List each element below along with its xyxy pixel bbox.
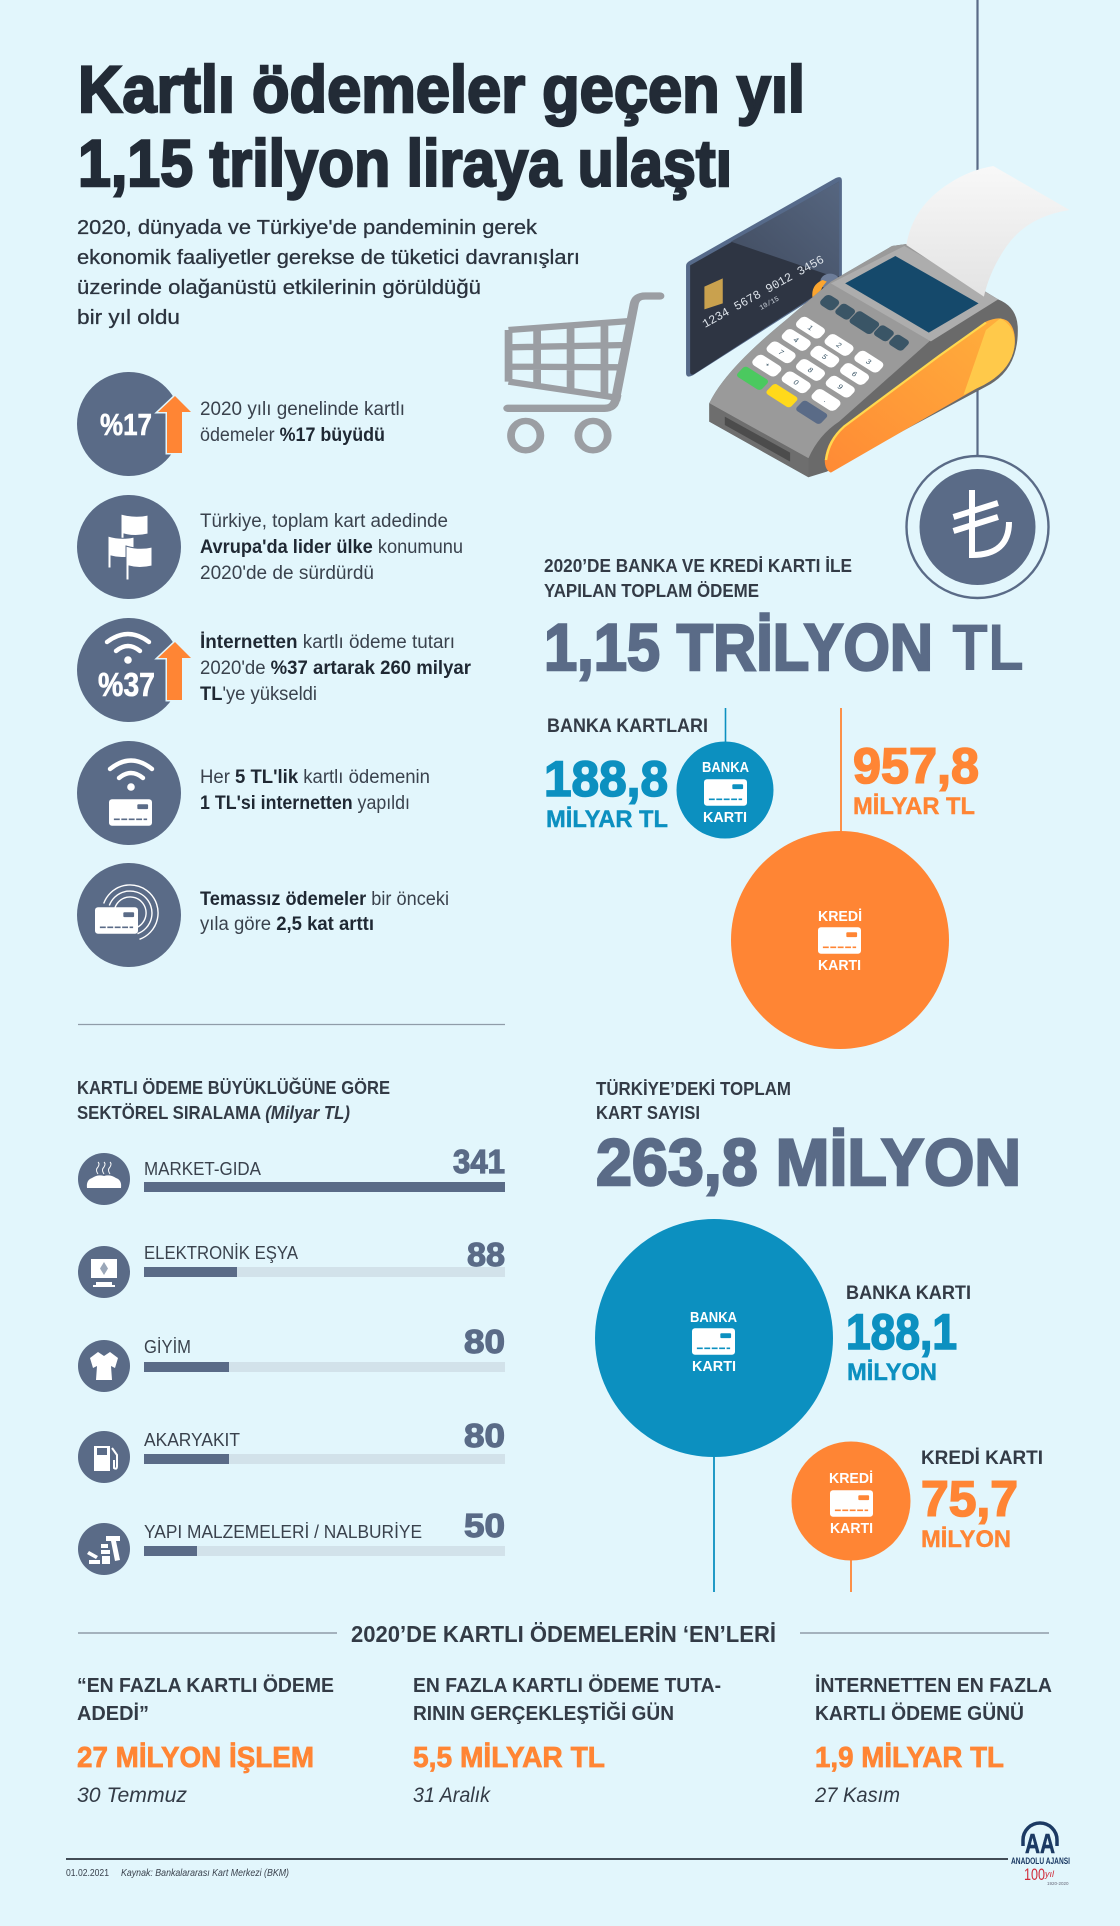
intro paragraph — [77, 216, 580, 329]
vertical connector line — [976, 0, 979, 456]
icon: lira coin — [906, 456, 1048, 598]
row: yapi malzemeleri: 50 — [464, 1507, 505, 1544]
fact 2: flags — [77, 495, 463, 599]
row: giyim — [78, 1323, 505, 1392]
column: highest payment day: RININ GERÇEKLEŞTİĞİ GÜN — [413, 1701, 674, 1725]
total card count heading — [596, 1079, 791, 1123]
fact 4: 5 TL internet — [77, 741, 430, 845]
intro paragraph: üzerinde olağanüstü etkilerinin görüldüğü — [77, 276, 481, 299]
column: highest payment day: 5,5 MİLYAR TL — [413, 1742, 605, 1774]
footer: date and source — [66, 1868, 289, 1879]
icon: POS terminal: 3 — [864, 357, 874, 366]
fact 2: flags: Avrupa'da lider ülke konumunu — [200, 537, 463, 558]
column: highest internet payment day: 1,9 MİLYAR TL — [815, 1742, 1004, 1774]
bank card count bubble: MİLYON — [847, 1359, 937, 1386]
fact 1: %17 growth — [77, 372, 405, 476]
fact 2: flags: Türkiye, toplam kart adedinde — [200, 511, 448, 532]
intro paragraph: ekonomik faaliyetler gerekse de tüketici davranışları — [77, 246, 580, 269]
fact 3: %37 internet: %37 — [98, 666, 155, 703]
total payment heading: YAPILAN TOPLAM ÖDEME — [544, 581, 759, 601]
icon: POS terminal: * — [762, 362, 771, 370]
total card count figure: 263,8 MİLYON — [596, 1125, 1021, 1199]
sector chart heading — [77, 1077, 390, 1123]
title: 1,15 trilyon liraya ulaştı — [78, 126, 732, 200]
column: most card payments: “EN FAZLA KARTLI ÖDEME — [77, 1674, 334, 1697]
footer: date and source: 01.02.2021 — [66, 1868, 109, 1879]
sector chart heading: SEKTÖREL SIRALAMA (Milyar TL) — [77, 1103, 350, 1123]
fact 3: %37 internet — [77, 618, 472, 722]
credit card payment bubble: MİLYAR TL — [853, 793, 975, 820]
column: highest payment day: 31 Aralık — [413, 1784, 491, 1807]
bank card payment bubble: BANKA — [702, 759, 749, 776]
logo: Anadolu Ajansi: ANADOLU AJANSI — [1011, 1856, 1070, 1866]
icon: POS terminal: 1 — [806, 323, 815, 332]
logo: Anadolu Ajansi: 100 — [1024, 1865, 1045, 1884]
bank card payment bubble — [544, 708, 774, 838]
icon: POS terminal: 4 — [791, 336, 801, 344]
total payment heading: 2020’DE BANKA VE KREDİ KARTI İLE — [544, 556, 852, 576]
icon: POS terminal: . — [822, 396, 830, 404]
intro paragraph: bir yıl oldu — [77, 306, 180, 329]
title — [78, 52, 805, 200]
bank card count bubble: KARTI — [692, 1358, 736, 1375]
fact 1: %17 growth: 2020 yılı genelinde kartlı — [200, 399, 405, 420]
fact 1: %17 growth: ödemeler %17 büyüdü — [200, 425, 385, 446]
fact 5: contactless — [77, 863, 449, 967]
bests section heading: 2020’DE KARTLI ÖDEMELERİN ‘EN’LERİ — [351, 1621, 776, 1647]
fact 4: 5 TL internet: 1 TL'si internetten yapıldı — [200, 793, 410, 814]
fact 5: contactless: yıla göre 2,5 kat arttı — [200, 914, 374, 935]
total card count heading: TÜRKİYE’DEKİ TOPLAM — [596, 1079, 791, 1099]
icon: POS terminal: 5 — [820, 352, 830, 361]
credit card count bubble: 75,7 — [921, 1471, 1018, 1527]
column: highest internet payment day: KARTLI ÖDEME GÜNÜ — [815, 1702, 1024, 1725]
column: most card payments — [77, 1674, 334, 1807]
total card count heading: KART SAYISI — [596, 1103, 700, 1123]
footer: date and source: Kaynak: Bankalararası Kart Merkezi (BKM) — [121, 1868, 289, 1879]
icon: POS terminal: 8 — [806, 366, 815, 374]
logo: Anadolu Ajansi: yıl — [1044, 1869, 1055, 1879]
bank card count bubble — [595, 1219, 971, 1592]
icon: POS terminal: 9 — [835, 382, 845, 391]
row: akaryakit: AKARYAKIT — [144, 1430, 240, 1450]
intro paragraph: 2020, dünyada ve Türkiye'de pandeminin gerek — [77, 216, 538, 239]
row: market-gida: MARKET-GIDA — [144, 1159, 261, 1179]
bank card payment bubble: BANKA KARTLARI — [547, 716, 708, 737]
row: elektronik esya: ELEKTRONİK EŞYA — [144, 1243, 298, 1263]
column: most card payments: ADEDİ” — [77, 1702, 149, 1725]
title: Kartlı ödemeler geçen yıl — [78, 52, 805, 126]
row: giyim: GİYİM — [144, 1337, 191, 1357]
row: elektronik esya — [78, 1236, 505, 1298]
bank card count bubble: BANKA KARTI — [846, 1282, 971, 1304]
credit card payment bubble: KARTI — [818, 957, 861, 974]
fact 5: contactless: Temassız ödemeler bir önceki — [200, 889, 449, 910]
icon: credit card — [686, 177, 842, 377]
column: highest payment day: EN FAZLA KARTLI ÖDEME TUTA- — [413, 1674, 721, 1697]
icon: credit card: 1234 5678 9012 3456 — [700, 253, 827, 331]
fact 2: flags: 2020'de de sürdürdü — [200, 563, 374, 584]
row: elektronik esya: 88 — [467, 1236, 505, 1273]
sector chart heading: KARTLI ÖDEME BÜYÜKLÜĞÜNE GÖRE — [77, 1077, 390, 1098]
icon: POS terminal: 0 — [791, 378, 801, 387]
row: market-gida: 341 — [453, 1143, 505, 1180]
logo: Anadolu Ajansi: 1920-2020 — [1047, 1881, 1069, 1886]
fact 3: %37 internet: 2020'de %37 artarak 260 milyar — [200, 658, 472, 679]
credit card payment bubble: KREDİ — [818, 908, 862, 925]
bank card count bubble: 188,1 — [846, 1304, 957, 1360]
bank card count bubble: BANKA — [690, 1309, 737, 1326]
logo: Anadolu Ajansi: AA — [1025, 1828, 1055, 1859]
bar chart: sectors — [78, 1143, 505, 1575]
column: highest payment day — [413, 1674, 721, 1807]
credit card count bubble — [792, 1442, 1043, 1592]
credit card payment bubble: 957,8 — [853, 738, 979, 794]
fact 3: %37 internet: TL'ye yükseldi — [200, 684, 317, 705]
column: highest internet payment day — [814, 1674, 1052, 1807]
column: highest internet payment day: 27 Kasım — [814, 1784, 900, 1807]
total payment figure: TL — [952, 610, 1024, 684]
total payment heading — [544, 556, 852, 601]
row: yapi malzemeleri — [78, 1507, 505, 1575]
fact 1: %17 growth: %17 — [100, 407, 152, 442]
total payment figure: 1,15 TRİLYON — [544, 610, 933, 684]
logo: Anadolu Ajansi — [1011, 1823, 1070, 1886]
row: akaryakit — [78, 1417, 505, 1483]
fact 4: 5 TL internet: Her 5 TL'lik kartlı ödemenin — [200, 767, 430, 788]
fact 3: %37 internet: İnternetten kartlı ödeme tutarı — [200, 632, 455, 653]
credit card count bubble: KREDİ — [829, 1470, 873, 1487]
icon: POS terminal: 2 — [834, 341, 844, 349]
icon: shopping cart — [508, 296, 660, 450]
icon: credit card: 10/15 — [759, 295, 781, 313]
icon: POS terminal: 7 — [776, 348, 786, 357]
bank card payment bubble: MİLYAR TL — [546, 806, 668, 833]
bank card payment bubble: KARTI — [703, 809, 747, 826]
column: most card payments: 27 MİLYON İŞLEM — [77, 1742, 314, 1774]
credit card count bubble: MİLYON — [921, 1526, 1011, 1553]
row: market-gida — [78, 1143, 505, 1205]
row: yapi malzemeleri: YAPI MALZEMELERİ / NALBURİYE — [144, 1522, 422, 1542]
credit card count bubble: KREDİ KARTI — [921, 1446, 1043, 1469]
bank card payment bubble: 188,8 — [544, 751, 668, 807]
column: most card payments: 30 Temmuz — [77, 1784, 188, 1807]
icon: POS terminal: 6 — [850, 370, 859, 378]
credit card payment bubble — [731, 708, 979, 1049]
icon: POS terminal — [709, 166, 1070, 477]
credit card count bubble: KARTI — [830, 1520, 873, 1537]
row: giyim: 80 — [464, 1323, 505, 1360]
column: highest internet payment day: İNTERNETTEN EN FAZLA — [815, 1674, 1052, 1697]
row: akaryakit: 80 — [464, 1417, 505, 1454]
